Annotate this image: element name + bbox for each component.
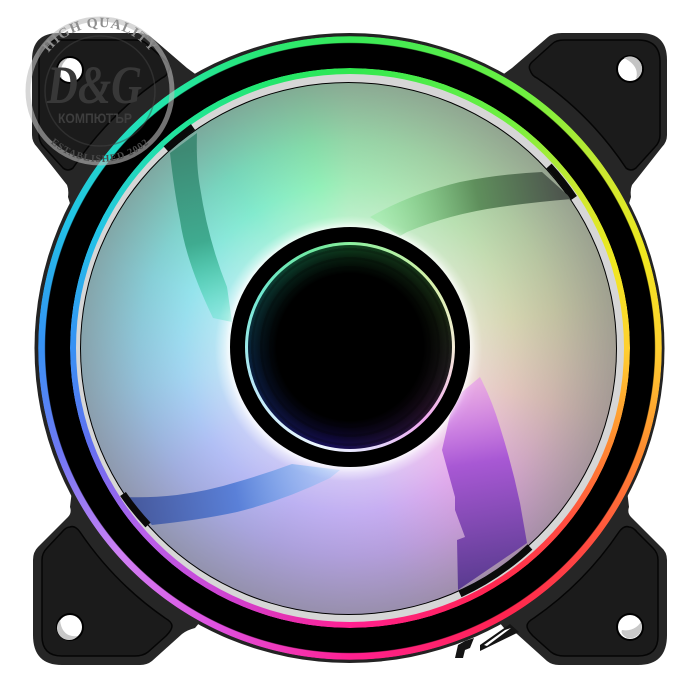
hub well <box>248 245 452 449</box>
blade: bottom right <box>442 377 527 590</box>
blade: top right <box>370 172 572 236</box>
watermark lower text: ESTABLISHED 2002 <box>50 138 148 162</box>
fan blade disc glow <box>81 82 616 614</box>
ear panels <box>39 40 660 656</box>
hub <box>230 227 470 467</box>
watermark subtitle: КОМПЮТЪР <box>58 110 132 126</box>
blade: bottom left <box>125 464 340 525</box>
black band <box>44 42 656 654</box>
watermark brand: D&G <box>46 55 142 115</box>
blade: top left <box>170 133 232 322</box>
grey inner rim <box>76 74 624 622</box>
logo mark on frame <box>455 624 519 658</box>
watermark curved text: HIGH QUALITY <box>42 18 158 52</box>
hub ring <box>245 242 455 452</box>
inner RGB ring <box>70 68 630 628</box>
outer RGB ring <box>38 36 662 660</box>
mounting holes <box>56 55 644 641</box>
blade tip wedges <box>123 127 574 594</box>
thin black rim line <box>80 82 617 614</box>
